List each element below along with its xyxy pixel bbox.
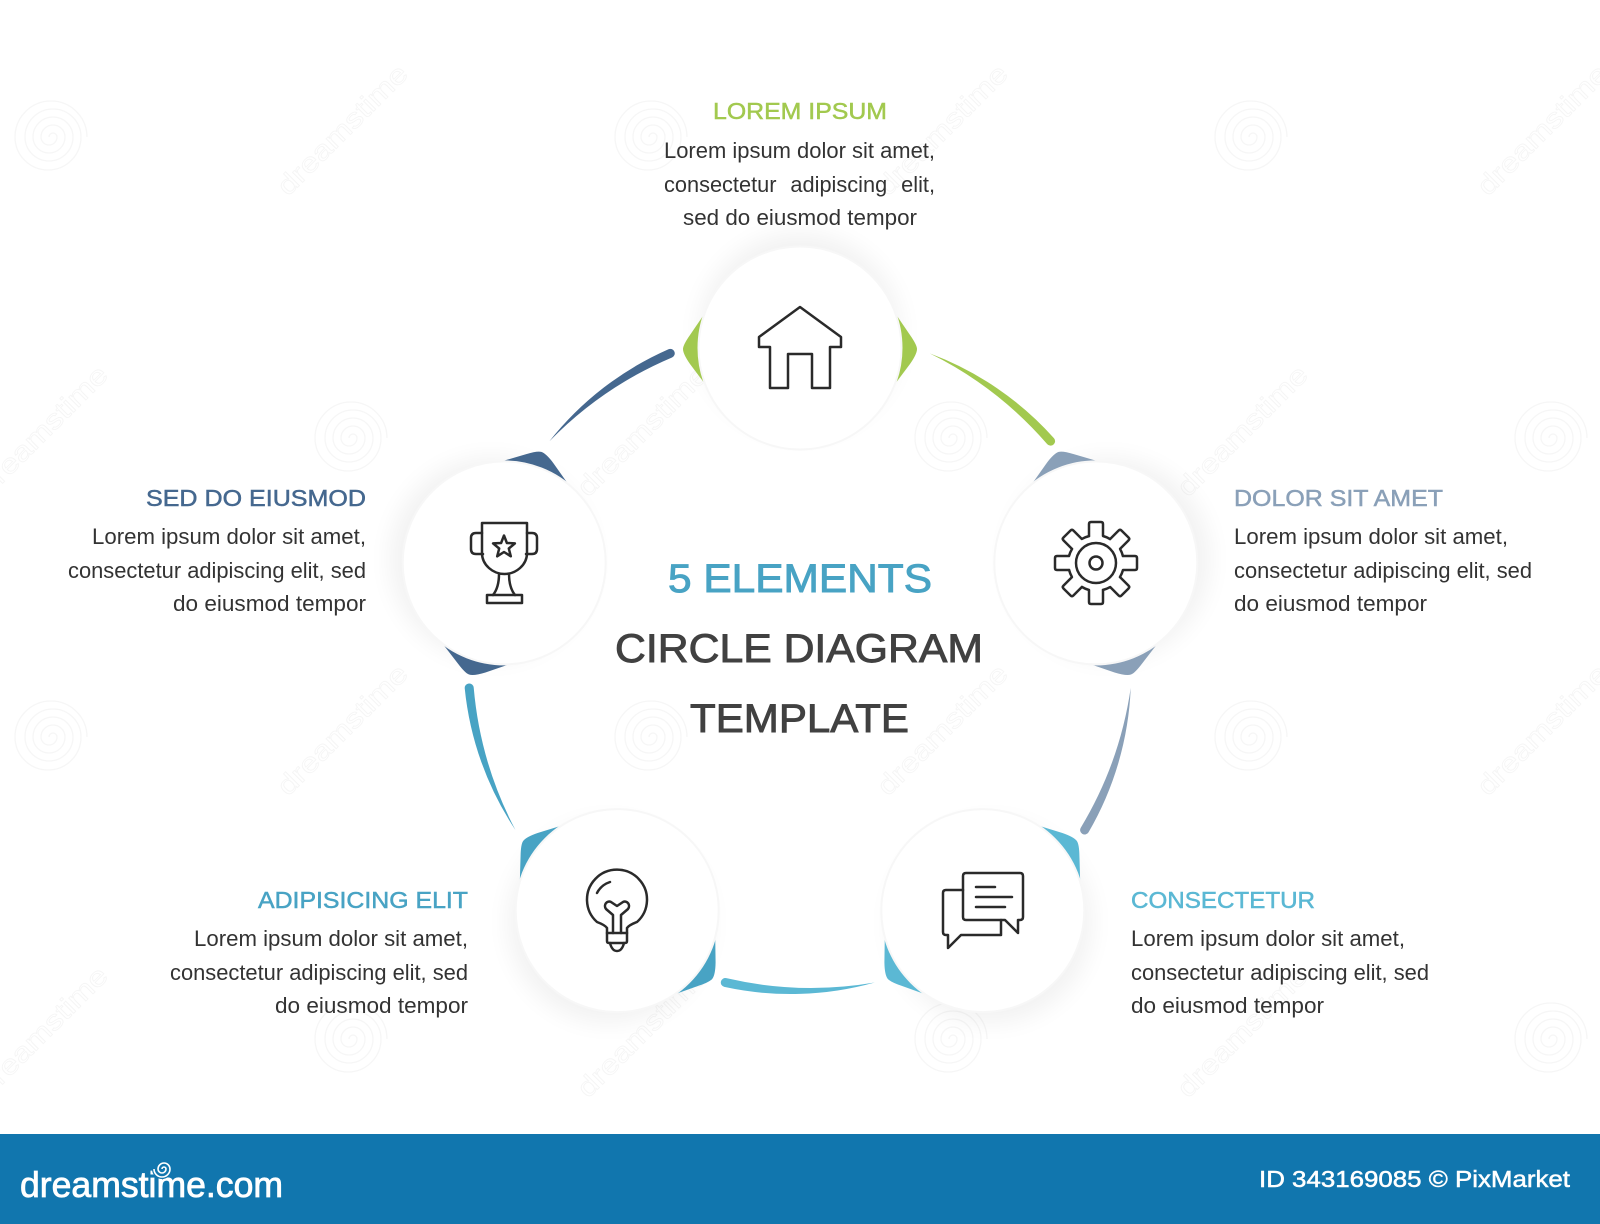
body text: consectetur adipiscing elit, sed xyxy=(1131,960,1429,985)
center title xyxy=(615,557,983,741)
body text xyxy=(1131,926,1429,1018)
text block: dolor sit amet xyxy=(1234,485,1532,616)
body text: do eiusmod tempor xyxy=(1234,591,1427,616)
heading: sed do eiusmod: SED DO EIUSMOD xyxy=(146,485,366,511)
text block: consectetur xyxy=(1131,887,1429,1018)
footer banner xyxy=(0,1134,1600,1224)
body text: Lorem ipsum dolor sit amet, xyxy=(1234,524,1508,549)
infographic: five element circle diagram: dreamstime xyxy=(1471,58,1600,201)
icon: light bulb xyxy=(587,870,647,951)
icon: speech bubbles xyxy=(943,873,1023,948)
text block: adipisicing elit xyxy=(170,887,468,1018)
body text: consectetur adipiscing elit, sed xyxy=(68,558,366,583)
text block: sed do eiusmod xyxy=(68,485,366,616)
panel: bottom right circle node xyxy=(867,809,1098,1023)
arrow arc: bottom right to bottom left (light blue) xyxy=(719,908,875,1056)
heading: adipisicing elit: ADIPISICING ELIT xyxy=(258,887,468,913)
infographic: five element circle diagram: dreamstime xyxy=(1171,960,1314,1103)
body text: Lorem ipsum dolor sit amet, xyxy=(1131,926,1405,951)
body text xyxy=(170,926,468,1018)
arrow arc: right to bottom right (grey blue) xyxy=(1043,688,1169,836)
body text: do eiusmod tempor xyxy=(173,591,366,616)
arrow arc: top to right (green) xyxy=(930,353,1055,446)
body text xyxy=(664,138,935,230)
text block: lorem ipsum xyxy=(664,98,935,230)
body text: Lorem ipsum dolor sit amet, xyxy=(92,524,366,549)
body text: consectetur adipiscing elit, xyxy=(664,172,935,197)
heading: consectetur: CONSECTETUR xyxy=(1131,887,1315,913)
heading: lorem ipsum: LOREM IPSUM xyxy=(713,98,887,124)
body text: consectetur adipiscing elit, sed xyxy=(1234,558,1532,583)
image id and credit: ID 343169085 © PixMarket xyxy=(1259,1166,1571,1192)
infographic: five element circle diagram: dreamstime xyxy=(1171,359,1314,502)
body text: do eiusmod tempor xyxy=(275,993,468,1018)
panel: left circle node xyxy=(390,441,606,685)
infographic: five element circle diagram: dreamstime xyxy=(271,658,414,801)
title line: circle diagram: CIRCLE DIAGRAM xyxy=(615,627,983,671)
infographic: five element circle diagram: dreamstime xyxy=(871,658,1014,801)
panel: right circle node xyxy=(994,441,1210,685)
body text: Lorem ipsum dolor sit amet, xyxy=(664,138,935,163)
logo: dreamstime: dreamstime.com xyxy=(20,1164,283,1205)
body text xyxy=(68,524,366,616)
title line: 5 elements: 5 ELEMENTS xyxy=(668,557,932,601)
infographic: five element circle diagram: dreamstime xyxy=(271,58,414,201)
body text: Lorem ipsum dolor sit amet, xyxy=(194,926,468,951)
icon: trophy xyxy=(471,523,537,603)
infographic: five element circle diagram: dreamstime xyxy=(871,58,1014,201)
infographic: five element circle diagram: dreamstime xyxy=(571,960,714,1103)
body text: sed do eiusmod tempor xyxy=(683,205,917,230)
panel: top circle node xyxy=(683,233,917,450)
panel: bottom left circle node xyxy=(502,809,733,1023)
icon: house xyxy=(759,307,841,388)
body text: do eiusmod tempor xyxy=(1131,993,1324,1018)
body text: consectetur adipiscing elit, sed xyxy=(170,960,468,985)
infographic: five element circle diagram: dreamstime xyxy=(571,359,714,502)
title line: template: TEMPLATE xyxy=(690,697,909,741)
heading: dolor sit amet: DOLOR SIT AMET xyxy=(1234,485,1443,511)
icon: gear xyxy=(1055,522,1137,604)
infographic: five element circle diagram: dreamstime xyxy=(1471,658,1600,801)
arrow arc: bottom left to left (blue) xyxy=(414,682,570,830)
arrow arc: left to top (navy) xyxy=(549,322,676,470)
body text xyxy=(1234,524,1532,616)
